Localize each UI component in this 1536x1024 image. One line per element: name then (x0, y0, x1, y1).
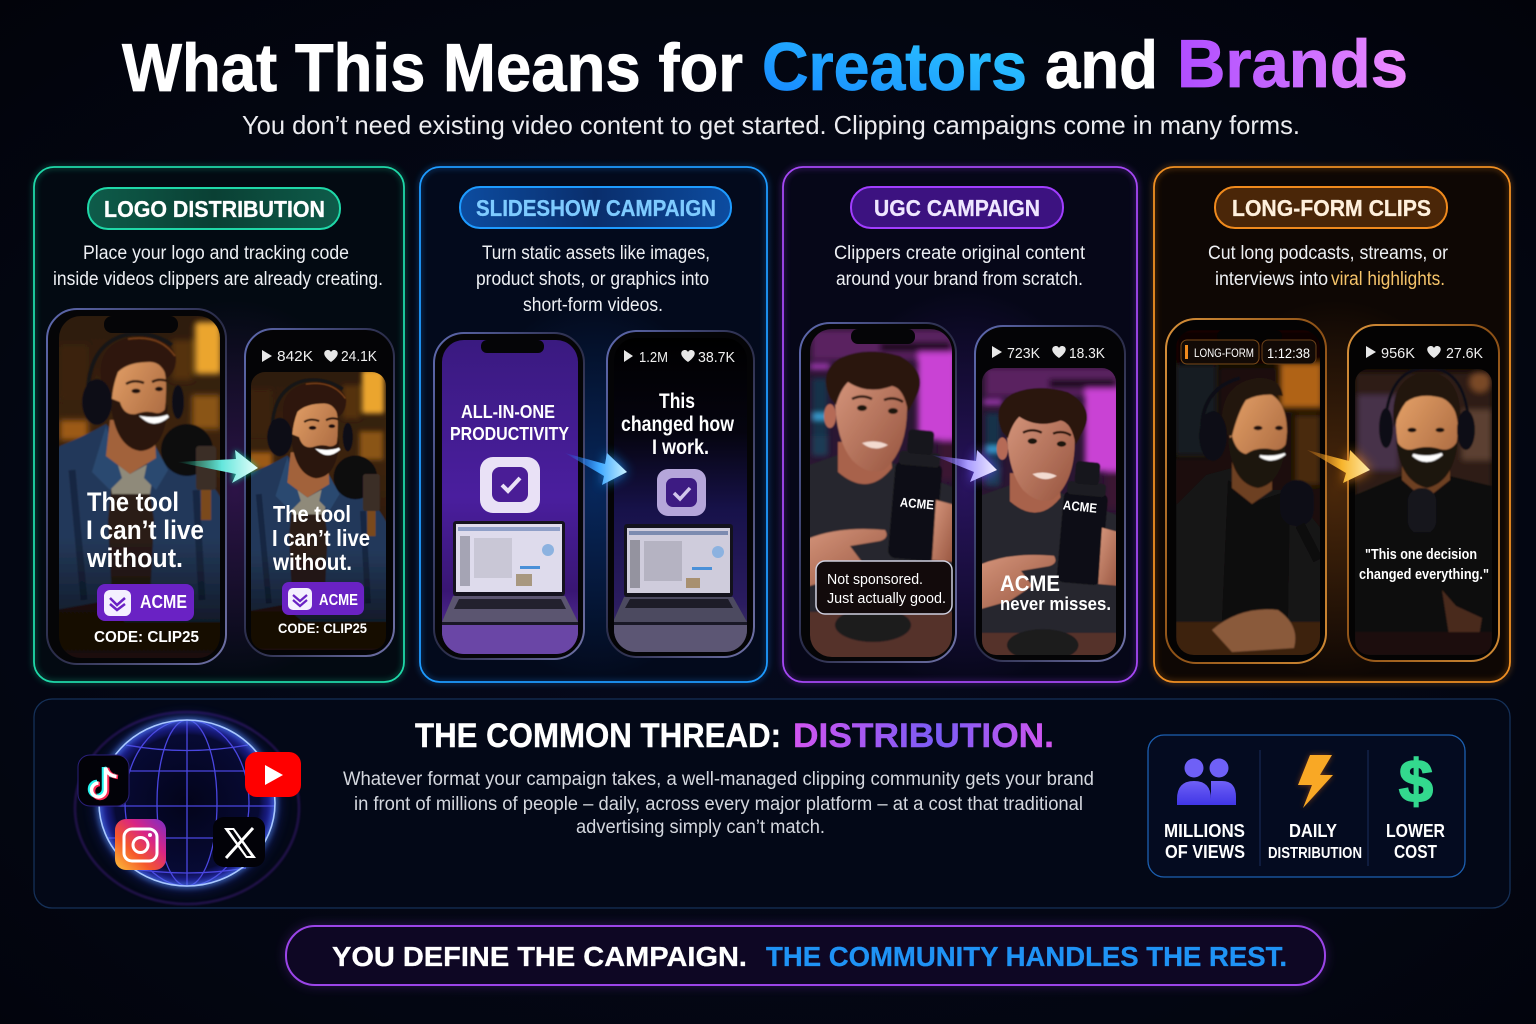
phone: creator testimonial: ACME (899, 495, 935, 512)
phone: ugc clip: never misses. (1000, 594, 1111, 614)
phone: static slide: ALL-IN-ONE (461, 402, 555, 422)
closing banner: THE COMMUNITY HANDLES THE REST. (766, 941, 1287, 972)
pill heading: slideshow campaign: SLIDESHOW CAMPAIGN (476, 195, 716, 221)
stats box (1148, 735, 1465, 877)
phone: long-form highlight clip: "This one decision (1365, 546, 1477, 563)
phone: original logo video: ACME (140, 592, 187, 612)
description: long-form clips (1208, 243, 1449, 290)
icon: youtube (245, 752, 301, 797)
stat: lower cost: LOWER (1386, 821, 1445, 841)
phone: static slide: PRODUCTIVITY (450, 424, 569, 444)
description: logo distribution (53, 243, 383, 290)
stat: daily distribution: DAILY (1289, 821, 1337, 841)
phone: clipped logo video (244, 328, 395, 657)
phone: long-form source (1166, 319, 1326, 663)
stat: lower cost: $ (1399, 748, 1433, 815)
panel: logo distribution (34, 167, 404, 682)
stat: daily distribution (1268, 755, 1362, 862)
phone: ugc clip: 18.3K (1069, 345, 1105, 362)
description: logo distribution: inside videos clippers are already creating. (53, 269, 383, 290)
phone: long-form highlight clip: 27.6K (1446, 345, 1483, 362)
pill heading: slideshow campaign (460, 187, 731, 228)
phone: clipped logo video: without. (272, 549, 352, 575)
description: ugc campaign: Clippers create original content (834, 243, 1086, 264)
phone: ugc clip: ACME (1000, 571, 1060, 596)
phone: ugc clip: ACME (1062, 497, 1098, 516)
description: logo distribution: Place your logo and tracking code (83, 243, 349, 264)
arrow: amber (1307, 450, 1370, 483)
phone: long-form highlight clip: changed everything." (1359, 566, 1489, 583)
phone: clipped logo video: CODE: CLIP25 (278, 620, 367, 636)
phone: creator testimonial: Not sponsored. (827, 571, 923, 588)
description: long-form clips: Cut long podcasts, streams, or (1208, 243, 1449, 264)
title (122, 26, 1408, 106)
pill heading: logo distribution: LOGO DISTRIBUTION (104, 196, 325, 222)
phone: long-form highlight clip (1348, 325, 1499, 661)
pill heading: logo distribution (88, 188, 340, 229)
phone: clipped logo video: The tool (273, 501, 351, 527)
phone: clipped logo video: ACME (319, 592, 358, 609)
phone: slideshow video: This (659, 390, 695, 413)
stat: daily distribution: DISTRIBUTION (1268, 845, 1362, 862)
pill heading: long-form clips: LONG-FORM CLIPS (1232, 195, 1431, 221)
phone: long-form source: LONG-FORM (1194, 346, 1254, 360)
subtitle: You don’t need existing video content to get started. Clipping campaigns come in many forms. (242, 110, 1300, 140)
description: slideshow campaign: Turn static assets like images, (482, 243, 710, 264)
phone: clipped logo video: 842K (277, 348, 313, 365)
title: Brands (1177, 26, 1408, 102)
description: long-form clips: viral highlights. (1331, 269, 1445, 290)
paragraph: in front of millions of people – daily, across every major platform – at a cost that traditional (354, 794, 1083, 815)
phone: slideshow video: I work. (652, 436, 709, 459)
heading: common thread: THE COMMON THREAD: (415, 717, 781, 755)
phone: creator testimonial: Just actually good. (827, 590, 946, 607)
paragraph (343, 769, 1094, 838)
phone: slideshow video (607, 331, 754, 657)
phone: slideshow video: changed how (621, 413, 735, 436)
panel: slideshow campaign (420, 167, 767, 682)
phone: original logo video: I can’t live (86, 515, 204, 545)
panel: ugc campaign (783, 167, 1137, 706)
paragraph: advertising simply can’t match. (576, 817, 825, 838)
heading: common thread (415, 717, 1054, 755)
phone: ugc clip: 723K (1007, 345, 1040, 362)
icon: tiktok (78, 755, 129, 806)
pill heading: ugc campaign (851, 187, 1063, 228)
paragraph: Whatever format your campaign takes, a well-managed clipping community gets your brand (343, 769, 1094, 790)
phone: original logo video: without. (86, 543, 183, 573)
phone: original logo video (46, 308, 227, 665)
phone: slideshow video: 1.2M (639, 349, 668, 366)
panel: long-form clips (1154, 167, 1510, 682)
icon: instagram (115, 819, 166, 870)
phone: creator testimonial (799, 322, 957, 663)
stat: millions of views (1164, 758, 1245, 862)
phone: slideshow video: 38.7K (698, 349, 735, 366)
stat: millions of views: OF VIEWS (1165, 842, 1245, 862)
heading: common thread: DISTRIBUTION. (793, 717, 1054, 755)
globe with platform icons (75, 712, 301, 904)
title: and (1045, 27, 1158, 103)
stat: lower cost (1386, 748, 1445, 862)
phone: static slide (434, 333, 584, 659)
panel: common thread (34, 699, 1510, 908)
title: Creators (762, 29, 1027, 105)
phone: long-form source: 1:12:38 (1267, 345, 1310, 361)
arrow: green (177, 450, 258, 483)
stat: millions of views: MILLIONS (1164, 821, 1245, 841)
description: ugc campaign: around your brand from scratch. (836, 269, 1083, 290)
pill heading: ugc campaign: UGC CAMPAIGN (874, 195, 1040, 221)
description: slideshow campaign: product shots, or graphics into (476, 269, 709, 290)
pill heading: long-form clips (1215, 187, 1447, 228)
description: long-form clips: interviews into (1215, 269, 1328, 290)
arrow: violet (932, 450, 997, 482)
description: slideshow campaign (476, 243, 710, 316)
phone: clipped logo video: 24.1K (341, 348, 377, 365)
phone: ugc clip (974, 325, 1126, 662)
stat: lower cost: COST (1394, 842, 1437, 862)
phone: long-form highlight clip: 956K (1381, 345, 1415, 362)
icon: x (213, 817, 265, 867)
closing banner (286, 926, 1325, 985)
phone: original logo video: The tool (87, 487, 179, 517)
description: slideshow campaign: short-form videos. (523, 295, 663, 316)
arrow: blue (565, 453, 627, 485)
title: What This Means for (122, 30, 743, 106)
description: ugc campaign (834, 243, 1086, 290)
closing banner: YOU DEFINE THE CAMPAIGN. (332, 941, 747, 972)
phone: clipped logo video: I can’t live (272, 525, 370, 551)
phone: original logo video: CODE: CLIP25 (94, 629, 199, 646)
